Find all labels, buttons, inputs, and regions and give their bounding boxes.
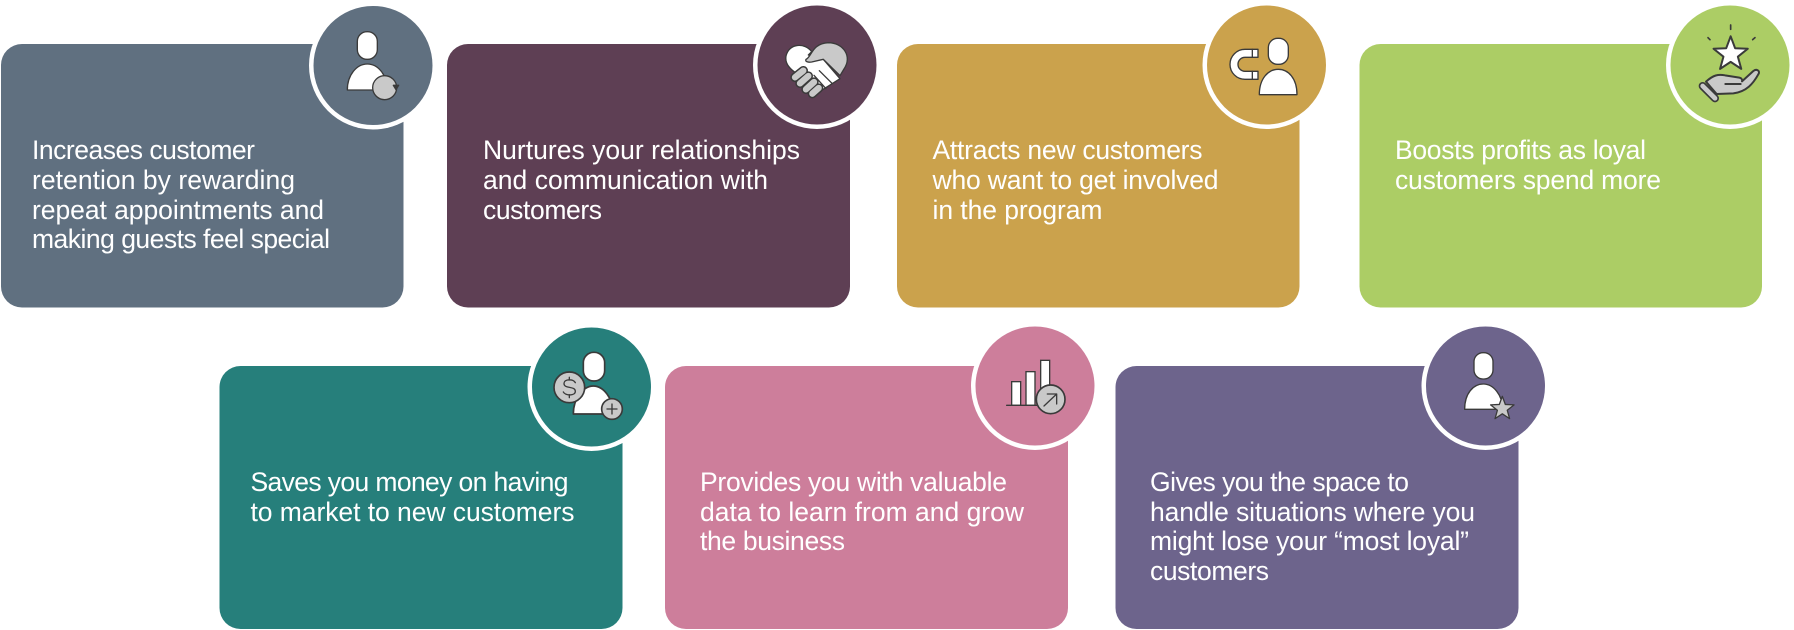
icon badge: person with dollar coin and plus xyxy=(528,323,656,451)
card text: customers xyxy=(1150,556,1269,586)
card background xyxy=(1360,44,1762,308)
panel: attracts new customers xyxy=(897,1,1330,308)
icon badge: person with repeat circle xyxy=(309,2,437,130)
card text: Attracts new customers xyxy=(932,135,1202,165)
card text: who want to get involved xyxy=(932,165,1218,195)
card text: customers spend more xyxy=(1395,165,1661,195)
card text: Provides you with valuable xyxy=(700,467,1007,497)
panel: saves money xyxy=(220,323,656,629)
icon badge: person with star xyxy=(1422,322,1550,450)
card text: Nurtures your relationships xyxy=(483,135,800,165)
card text: in the program xyxy=(932,195,1102,225)
card text: Saves you money on having xyxy=(250,467,568,497)
card background xyxy=(447,44,850,308)
icon badge: handshake heart xyxy=(753,1,881,129)
card background xyxy=(1116,366,1518,629)
card background xyxy=(1,44,404,308)
card text: Increases customer xyxy=(32,135,255,165)
card text: to market to new customers xyxy=(250,497,574,527)
panel: valuable data xyxy=(665,322,1099,629)
icon badge: bar chart with arrow xyxy=(971,322,1099,450)
card text: Gives you the space to xyxy=(1150,467,1409,497)
panel: losing most loyal customers xyxy=(1116,322,1550,629)
card text: might lose your “most loyal” xyxy=(1150,526,1469,556)
card text: repeat appointments and xyxy=(32,195,324,225)
card text: the business xyxy=(700,526,845,556)
card background xyxy=(220,366,622,629)
card background xyxy=(665,366,1068,629)
card text: data to learn from and grow xyxy=(700,497,1025,527)
card text: making guests feel special xyxy=(32,224,330,254)
card text: customers xyxy=(483,195,602,225)
card text: Boosts profits as loyal xyxy=(1395,135,1646,165)
card text: and communication with xyxy=(483,165,768,195)
card text: handle situations where you xyxy=(1150,497,1475,527)
card text: retention by rewarding xyxy=(32,165,295,195)
icon badge: magnet and person xyxy=(1202,1,1330,129)
icon badge: star over open hand xyxy=(1666,1,1794,129)
panel: relationships and communication xyxy=(447,1,881,308)
panel: boosts profits xyxy=(1360,1,1794,308)
panel: customer retention xyxy=(1,2,437,308)
card background xyxy=(897,44,1300,308)
